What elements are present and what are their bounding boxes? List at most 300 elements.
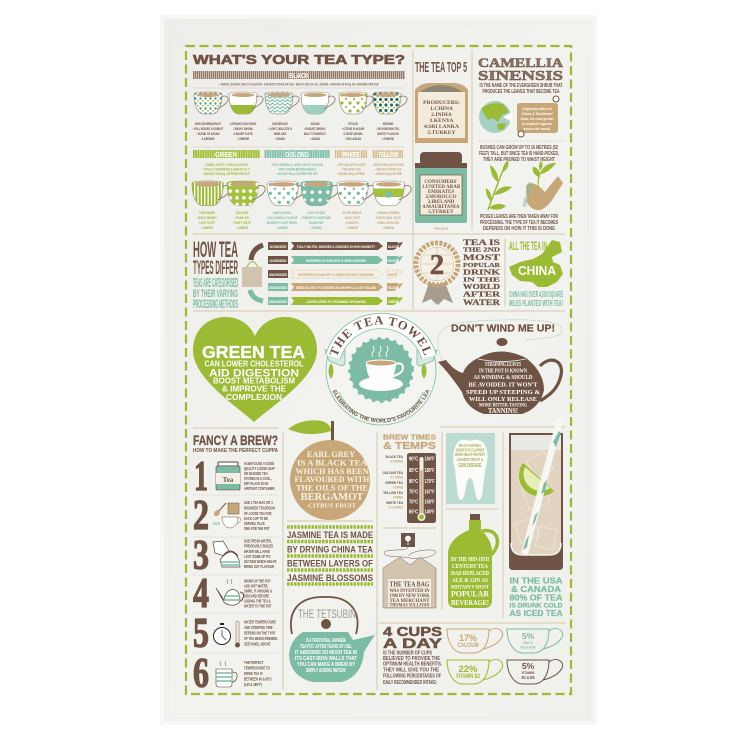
sack: producers [415,83,468,143]
green tea benefits: AID DIGESTION [209,368,299,380]
caption: darjeeling [268,121,292,141]
tetsubin text: YOU CAN MAKE A BREW BY [297,662,356,668]
earl grey text: EARL GREY [307,450,355,459]
caption: keemun: • CHINESE [382,136,395,141]
caption: junshan yinzhen: & MELLOW BLOSS [377,220,400,225]
icon: bergamot stem [331,421,334,444]
cup: vitamin b1 and b6: B1 & B6 [522,675,535,680]
earl grey text: BERGAMOT [300,492,364,503]
step 4 text: WARM UP THE POT - [244,579,273,584]
teapot text: IN THE POT IS KNOWN [479,368,528,374]
text: tea is the 2nd most popular drink: DRINK [463,268,500,276]
row: green: UNOXIDISED [269,300,287,304]
caption: ceylon [342,121,365,141]
caption: english breakfast: & KEEMUN [202,136,215,141]
green description [202,162,250,176]
panel: green tea heart [193,317,317,422]
ice cubes [514,451,557,549]
tin: consumers: 1.UNITED ARAB [422,185,461,190]
step 3 text: OXYGEN WHICH HELPS [244,559,277,564]
caption: dark oolong: • CHINESE [276,225,288,230]
row: oolong: OOLONG [388,259,398,263]
step 2 text: ROUNDED TEASPOON [244,506,275,511]
panel: fancy a brew [193,432,278,697]
tin: consumers: 5.TURKEY [428,210,454,215]
step 5 text: DEPEND ON THE TYPE [244,631,276,636]
caption: light oolong: LIGHT OOLONG [307,210,325,215]
icon: bergamot leaf [288,420,331,434]
cup: vitamin b1 and b6 [507,660,563,684]
row: white: WHITE [388,273,397,277]
banner: green: GREEN [215,152,237,159]
step 4 text: WATER TO THE POT [244,604,272,609]
icon: tea bag tag [401,533,415,547]
tin: consumers: CONSUMERS' [424,180,458,185]
icon: leaf left [328,363,334,379]
heading: camellia sinensis [478,55,564,84]
teapot text: WILL ONLY RELEASE [469,396,537,403]
cup: zinc and folic acid: 5% [522,631,535,641]
sack: producers: 5.TURKEY [427,130,456,136]
step numbers: 2 [193,493,209,539]
white description [337,162,365,176]
dotted separators [193,495,278,653]
earl grey text: IS A BLACK TEA [297,458,367,468]
chart: thermometer: 80°C [409,479,418,485]
row: white [268,270,403,278]
step 6 text: THE PERFECT [244,660,264,665]
banner: yellow: YELLOW [378,152,398,159]
icon: bergamot fruit [290,440,370,520]
caption: english breakfast: • BLEND OF ASSAM [197,131,220,136]
tetsubin text: IS A TRADITIONAL JAPANESE [306,638,346,644]
black tea description: • TANNIC, EARTHY, MALTY FLAVOUR • THE MOST POPULAR TEA - ABOUT 80% OF ALL DRUNK • AROUND 40-47mg OF CAFFEINE PER CUP [219,82,379,86]
white description: • THE PUREST TEA [341,167,361,172]
row: green: GREEN [388,300,397,304]
icon: tea caddy: Tea [223,476,234,484]
cup: keemun [373,92,407,114]
caption: lapsang souchong [230,121,257,141]
caption: chun mee: CHUN MEE [236,210,249,215]
callout: native to china [517,96,559,137]
step 3 text: USE FRESH WATER, [244,539,272,544]
cup: zinc and folic acid: FOLIC ACID [520,644,536,650]
4 cups text: FOLLOWING PERCENTAGES OF [383,674,441,680]
title: what's your tea type: WHAT'S YOUR TEA TYPE? [193,52,405,67]
caption: junshan yinzhen: • RICH FLORAL TASTE [375,215,402,220]
caption: chun mee: • PLUM LIKE, [234,215,250,220]
jug text: ALE & GIN AS [452,578,489,584]
row: black: OXIDISED [270,245,287,249]
caption: darjeeling: • LIGHT, DELICATE & [268,126,292,131]
caption: silver needle [343,210,362,230]
tea bag label [388,579,431,607]
step 5 text: OF TEA BEING BREWED. [244,636,278,641]
caption: darjeeling: WINE LIKE [274,131,287,136]
icon: rosette medal: 2 [430,249,444,281]
tea bag text: TEA MERCHANT [390,598,430,604]
panel: green oolong white yellow teas [192,150,411,230]
heading: 4 cups a day: 4 CUPS [383,625,442,639]
text: tea is the 2nd most popular drink: POPULAR [463,263,501,269]
panel: what's your tea type [193,52,407,141]
caption: light oolong: • CHINESE [310,225,322,230]
iced tea text: IS DRUNK COLD [510,604,563,610]
brew time labels: BLACK TEA [385,455,403,459]
chart: thermometer: 158°F [424,500,434,506]
panel: number 2 medal [416,238,501,307]
step 4 text: SWIRL IT AROUND & [244,589,272,594]
banner: white: WHITE [342,152,360,159]
brew time labels: 5-7 MINS [390,475,404,480]
oolong description [271,162,324,176]
icon: mug [216,661,237,687]
jug text: BEVERAGE! [451,599,489,607]
earl grey text: WHICH HAS BEEN [296,467,369,476]
icon: teapot [438,338,561,414]
arrow: unoxidised branch [250,290,263,301]
text: tea is the 2nd most popular drink [463,238,501,307]
cup: calcium [447,629,503,653]
heading: brew times and temps: & TEMPS [383,440,436,452]
sack: producers: 1.CHINA [430,106,453,112]
row: green: LEAVES DRIED BY STEAMING OR BAKING [306,300,366,304]
chart: thermometer: 70°C [409,500,418,506]
caption: ceylon: & CRISP AROMA [343,131,363,136]
caption: keemun: WHITEY FLAVOUR [377,131,399,136]
row: black: FULLY WILTED, BRUISED & OXIDISED IN HIGH HUMIDITY [297,245,375,249]
earl grey text: THE OILS OF THE [296,484,368,492]
step 4 text [244,579,273,609]
tetsubin text: TEA POT. AFTER YEARS OF USE, [300,644,352,650]
step numbers [193,454,209,697]
panel: iced tea [509,418,563,618]
label: china: CHINA [518,263,557,278]
banner: oolong: OOLONG [285,152,309,159]
brew time labels: 3 MINS [393,485,404,490]
icon: kettle knob [321,619,331,629]
panel: jasmine tea [287,527,373,584]
heading: camellia sinensis: SINENSIS [478,69,563,84]
step 1 text: DRY PLACE IN AN [244,481,269,486]
right ribbon tail [417,350,437,366]
step 2 text: USE 1 TEA BAG OR 1 [244,500,273,505]
camellia description: IS THE NAME OF THE EVERGREEN SHRUB THAT [480,83,562,89]
caption: silver needle: • SILKY, SOFT [344,215,360,220]
camellia description: PRODUCES THE LEAVES THAT BECOME TEA [482,89,560,95]
green tea benefits: COMPLEXION [226,393,282,402]
jasmine text: BY DRYING CHINA TEA [287,544,373,554]
tea bag text: THE TEA BAG [390,580,430,588]
step numbers: 4 [193,571,209,617]
chart: thermometer: 75°C [409,490,418,496]
caption: assam [304,121,327,141]
cup: vitamin b2: VITAMIN B2 [456,674,480,680]
icon: cup and saucer [359,346,403,391]
step 6 text: TEMPERATURE TO [244,666,270,671]
step 2 text: EACH CUP TO BE [244,516,268,521]
row: yellow [268,283,403,291]
oolong description: • BEST KNOWN BETWEEN MEALS [278,167,316,172]
outer ring [326,315,436,425]
tetsubin text: ITS CAST-IRON WALLS THAT [295,656,357,662]
brew time labels [383,455,404,510]
step 6 text [244,660,272,687]
step 6 text: (140 & 185°F) [244,682,262,687]
heading: the tetsubin: THE TETSUBIN [298,607,356,621]
green tea benefits: & IMPROVE THE [222,384,287,394]
chart: thermometer: 194°F [424,456,434,462]
cup: gunpowder [192,181,230,206]
brew time labels: WHITE TEA [386,501,403,505]
step numbers: 3 [193,533,209,579]
left ribbon tail [325,350,345,366]
sack: producers: PRODUCERS: [423,100,460,106]
icon: glass [509,433,563,570]
icon: hand picking tea [522,161,563,210]
step 6 text: DRINK TEA IS [244,671,263,676]
caption: english breakfast: ENGLISH BREAKFAST [195,121,221,126]
picked leaves text: PROCESSING. THE TYPE OF TEA IT BECOMES [480,220,558,226]
step 2 text: OF LOOSE TEA FOR [244,511,272,516]
tetsubin text [295,638,357,674]
cup: darjeeling [265,92,299,114]
text: china square miles [509,289,563,308]
caption: silver needle: SILVER NEEDLE [343,210,362,215]
teapot text [466,362,541,415]
jug text: BY THE MID-18TH [451,557,489,563]
brew time labels: OOLONG TEA [383,471,403,475]
text: tea is the 2nd most popular drink: AFTER [463,290,501,298]
icon: globe [479,101,512,133]
row: white: UNOXIDISED [269,273,287,277]
jug text: CENTURY TEA [452,564,489,570]
step 1 text: QUALITY LOOSE LEAF [244,466,276,471]
step 4 text: ADDING THE TEA & [244,599,271,604]
jug text [451,557,490,607]
cup: ceylon [339,92,373,114]
oolong description: • AROUND 50mg CAFFEINE PER CUP [276,171,318,176]
camellia description [480,83,562,95]
sack: producers: 4.SRI LANKA [424,124,459,130]
icon: teaspoon and cup: PER [213,521,220,526]
row: yellow: DRIED SLOWLY TO OXIDISE CHLOROPHYLL & GO YELLOW [296,286,376,290]
icon: kettle handle [291,597,358,634]
caption: light oolong [301,210,331,230]
caption: gunpowder: • BODY, SMOKEY, [197,215,217,220]
caption: junshan yinzhen: • CHINESE [382,225,395,230]
panel: how tea types differ [193,237,403,311]
tea bag text [390,580,430,608]
step numbers: 6 [193,651,209,697]
green tea benefits [204,360,304,402]
step 1 text: ALWAYS USE A GOOD [244,461,274,466]
yellow description: • SMOOTH MELLOW FLAVOUR [373,162,403,167]
teapot text: SPEED UP STEEPING & [466,389,541,396]
step 3 text: LOST SOME OF ITS [244,554,271,559]
sack: producers: 2.INDIA [431,112,452,118]
footnote: per capita: * PER CAPITA [434,227,449,231]
yellow description [373,162,403,176]
jasmine text [287,530,373,583]
caption: gunpowder: • CHINESE [201,225,214,230]
caption: english breakfast [193,121,223,141]
cup: chun mee [227,181,265,206]
dividers [193,50,566,690]
icon: jug body [448,520,492,608]
jasmine dotted bars [287,527,373,584]
tooth panel background [446,433,495,504]
panel: how tea types differ: PROCESSING METHODS [193,297,238,311]
step 3 text: BRING OUT FLAVOUR [244,564,274,569]
jug text: HAD REPLACED [451,571,490,577]
caption: lapsang souchong: • CHINESE [237,136,250,141]
green description: • TOTALLY UNOXIDISED & HIGH IN VIT. C [202,167,250,172]
earl grey text: FLAVOURED WITH [294,475,370,484]
tea bag text: 1908 BY NEW YORK [390,594,430,599]
text: tea is the 2nd most popular drink: IN THE [463,276,500,284]
iced tea text: 80% OF TEA [510,594,563,602]
scalloped medallion [350,339,412,401]
caption: lapsang souchong: & SHARP TASTE [233,131,253,136]
step numbers: 1 [194,454,208,500]
caption: light oolong: CHARACTER [309,220,324,225]
row: yellow: YELLOW [388,286,398,290]
icon: tooth [453,440,488,500]
icon: china map [509,240,563,287]
icon: teaspoon and cup [213,503,241,528]
jasmine text: JASMINE TEA IS MADE [287,530,373,540]
teapot text: AS WINDING & SHOULD [474,375,532,381]
4 cups text: THEY WILL GIVE YOU THE [383,668,440,674]
banner: oolong [264,150,330,159]
step 4 text: DISCARD BEFORE [244,594,270,599]
icon: tea bag [383,557,436,608]
panel: brew times and temps [383,434,436,523]
heading: camellia sinensis: CAMELLIA [478,55,564,70]
earl grey text [294,450,370,510]
tin: consumers [415,152,467,223]
tetsubin text: SIMPLY ADDING WATER! [306,668,346,674]
iced tea text [510,576,563,618]
caption: lapsang souchong: • SMOKY AROMA [233,126,253,131]
row: oolong: OXIDISED [270,259,287,263]
row: black: BLACK [388,245,397,249]
heading: 4 cups a day: A DAY [383,635,443,651]
step 2 text: SERVED, PLUS [244,521,265,526]
step 2 text: ONE FOR THE POT [244,526,270,531]
tetsubin text: IT ABSORBS SO MUCH TEA IN [295,650,357,656]
icon: tea caddy [216,462,240,490]
panel: the tea towel badge [324,313,438,426]
callout: native to china: China & Southeast [522,112,553,116]
tin: consumers: 3.IRELAND [428,200,455,205]
step 6 text: BETWEEN 60 & 85°C [244,677,272,682]
step 5 text [244,620,278,647]
cup: junshan yinzhen [373,181,411,206]
panel: camellia sinensis [478,55,564,232]
tooth text: SOURCE OF FLUORIDE [456,448,485,453]
tooth text: GUM DISEASE [458,462,482,468]
subheading: how to make: HOW TO MAKE THE PERFECT CUPPA [193,448,278,454]
caption: junshan yinzhen [375,210,402,230]
iced tea text: IN THE USA [510,576,563,586]
jug text: POPULAR [451,588,490,598]
icon: leaf right [422,363,426,379]
cup: vitamin b1 and b6: 5% [522,661,535,671]
white description: • VERY DELICATE FLAVOUR [337,162,365,167]
white description: • AROUND 40mg CAFFEINE [337,171,365,176]
step 5 text: WATER TEMPERATURE [244,620,276,625]
earl grey text: CITRUS FRUIT [308,504,356,510]
caption: chun mee: • CHINESE [236,225,249,230]
picked leaves text [480,214,558,232]
bushes text: THEY ARE PRUNED TO WAIST HEIGHT [483,157,555,163]
icon: tea plant [486,160,512,210]
picked leaves text: PICKED LEAVES ARE THEN TAKEN AWAY FOR [480,214,558,220]
caption: gunpowder: GUNPOWDER [199,210,215,215]
panel: all the tea in china [509,239,563,308]
caption: dark oolong: BE MOUTHY LIGHT GREEN [267,220,298,225]
bushes text [479,145,559,163]
text: tea is the 2nd most popular drink: THE 2ND [463,248,501,254]
tea bag text: WAS INVENTED IN [390,589,430,594]
caption: keemun: KEEMUN [383,121,394,126]
step 3 text [244,539,277,569]
heading: brew times and temps [383,434,436,452]
caption: darjeeling: DARJEELING [272,121,288,126]
tin: consumers: 4.MAURITANIA [422,205,460,210]
text: CHINA HAS OVER 4,500 SQUARE [509,289,563,299]
green tea benefits: CAN LOWER CHOLESTEROL [204,360,304,368]
caption: lapsang souchong: LAPSANG SOUCHONG [230,121,257,126]
step 3 text: WATER WILL HAVE [244,549,270,554]
iced tea text: & CANADA [511,585,561,594]
icon: kettle and jug [213,541,240,567]
icon: warming teapot [216,579,244,605]
callout: native to china: Asia, it's now grown [520,117,554,121]
step 1 text: OR BAGGED TEA [244,471,268,476]
banner: green [193,150,260,159]
caption: junshan yinzhen: JUNSHAN YINZHEN [377,210,400,215]
caption: dark oolong [267,210,298,230]
row: yellow: UNOXIDISED [269,286,287,290]
cup: zinc and folic acid: ZINC & [523,640,533,645]
step 3 text: PREVIOUSLY BOILED [244,544,273,549]
4 cups text: OPTIMUM HEALTH BENEFITS. [383,662,442,668]
tooth text: TEA IS A NATURAL [459,443,481,448]
caption: ceylon: • CITRUS FLAVOUR [342,126,365,131]
heading: green tea: GREEN TEA [202,342,305,362]
top ribbon inner [333,321,429,357]
panel: how tea types differ: TEAS ARE CATEGORISED [193,275,238,290]
iced tea text: AS ICED TEA [510,609,563,618]
oolong description: • RICH, MINERALLY, HONEY, FRUITY FLAVOUR [271,162,324,167]
step 5 text: SEE PANEL ABOVE [244,642,271,647]
callout: native to china: Originally native to [522,107,553,111]
caption: light oolong: • PINEAPPLE & MOISTURE [301,215,331,220]
step 4 text: ADD HOT WATER, [244,584,268,589]
chart: thermometer: 176°F [424,479,434,485]
icon: tetsubin body [289,632,375,682]
4 cups text: DAILY RECOMMENDED INTAKE: [383,680,437,686]
cup: silver needle [337,181,375,206]
caption: silver needle: • CHINESE [346,225,359,230]
step 2 text [244,500,275,531]
chart: thermometer: 185°F [424,468,434,474]
chart: thermometer: 85°C [409,468,418,474]
brew time labels: 4-16 MINS [388,505,404,510]
